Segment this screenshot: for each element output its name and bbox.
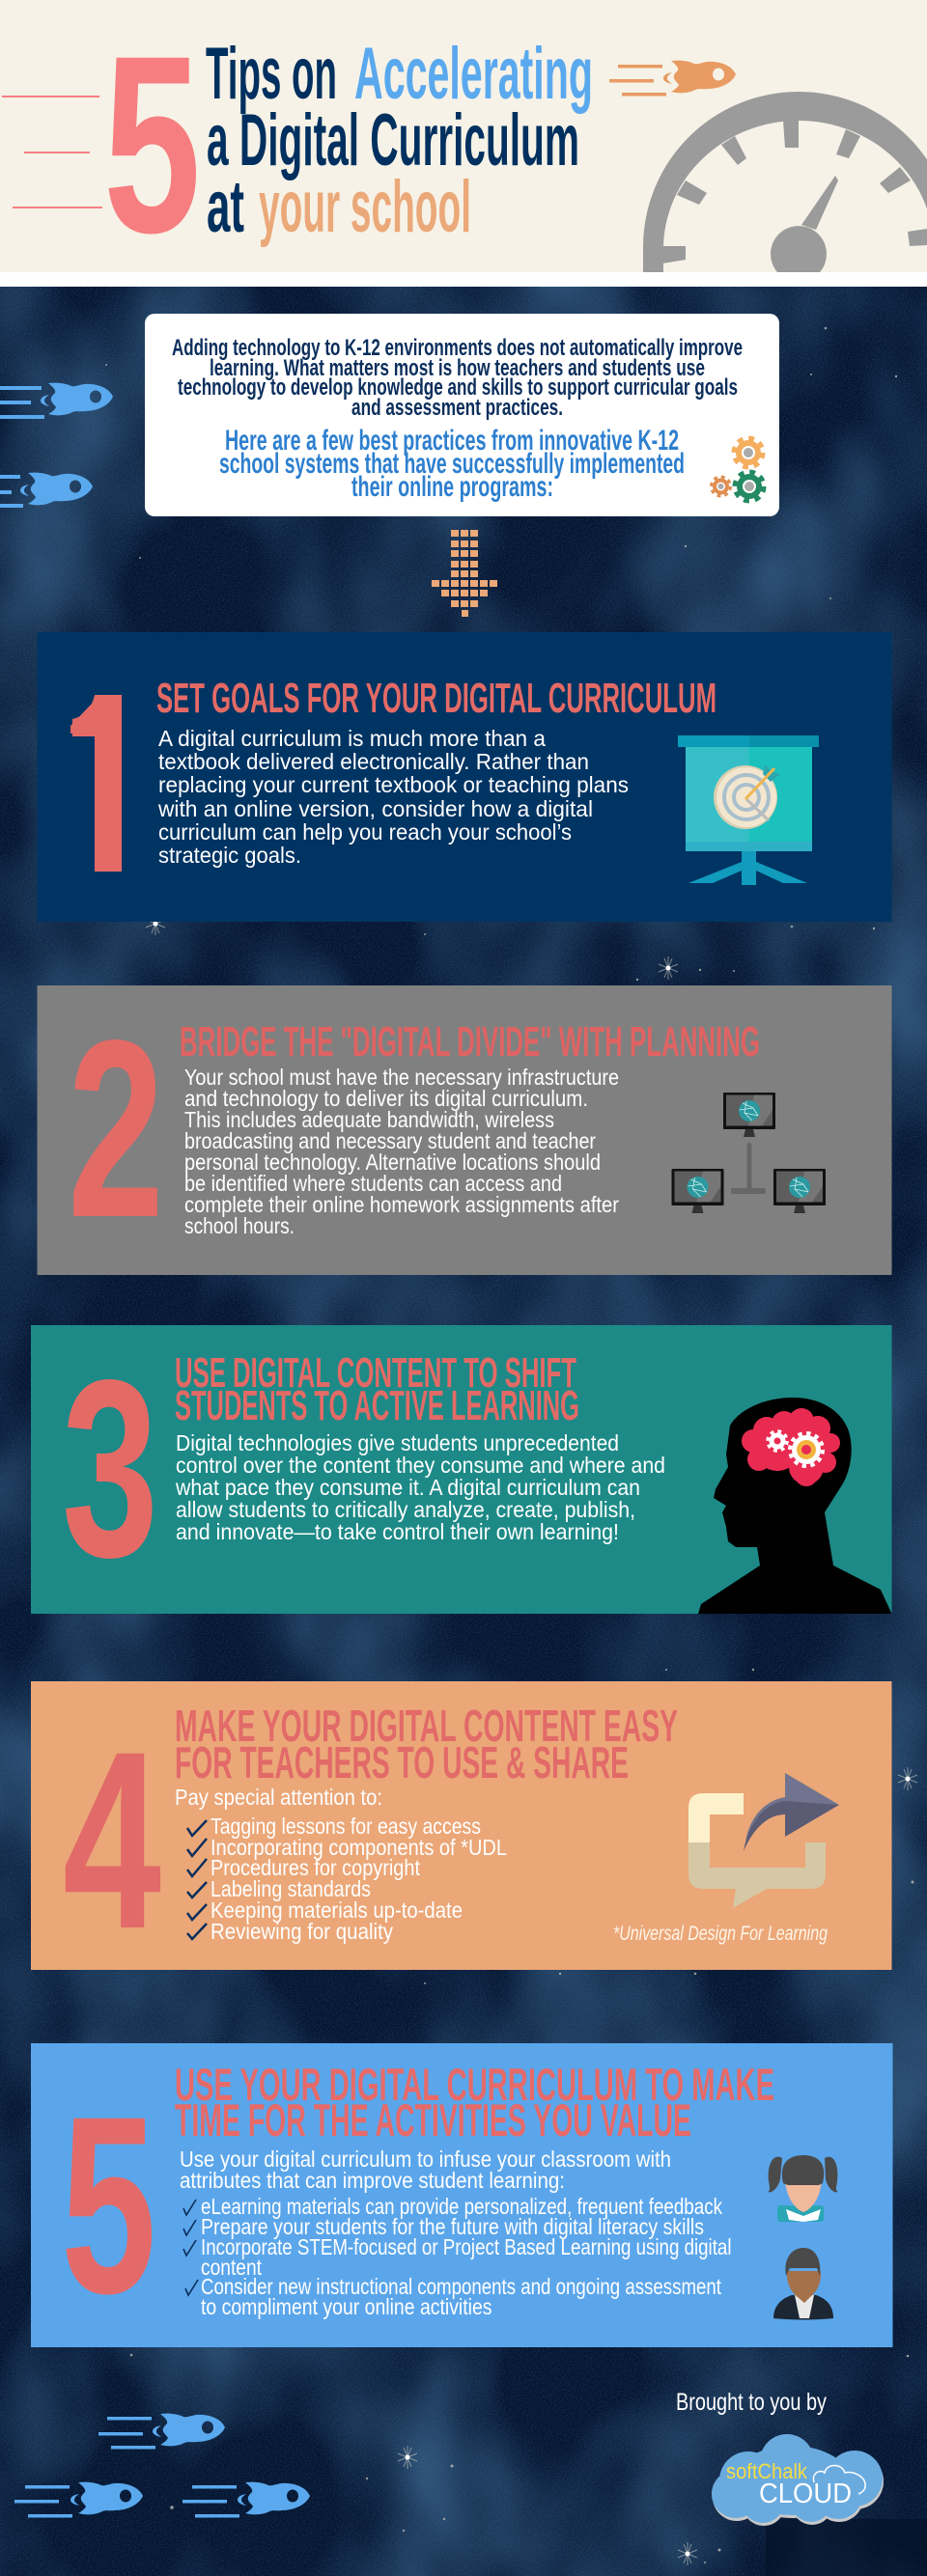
body text: [157, 726, 629, 868]
icon: share speech bubble: [688, 1773, 839, 1908]
title: at: [207, 166, 244, 248]
intro card: [145, 314, 779, 516]
checklist: Reviewing for quality: [211, 1919, 393, 1944]
body text: school hours.: [184, 1213, 295, 1238]
logo: SoftChalk Cloud: [712, 2434, 884, 2526]
heading: [175, 1349, 579, 1429]
body text: allow students to critically analyze, create, publish,: [176, 1497, 635, 1522]
logo: SoftChalk Cloud: CLOUD: [759, 2479, 852, 2509]
checklist: Incorporating components of *UDL: [211, 1835, 507, 1860]
panel background: [37, 632, 892, 922]
cloud shape: [713, 2437, 884, 2526]
panel: tip 2: [37, 985, 892, 1275]
body text: and innovate—to take control their own learning!: [176, 1519, 619, 1544]
checklist: Incorporate STEM-focused or Project Based Learning using digital: [201, 2234, 732, 2259]
heading: FOR TEACHERS TO USE & SHARE: [175, 1737, 629, 1787]
body intro: Pay special attention to:: [175, 1785, 382, 1810]
white separator strip: [0, 272, 927, 287]
body text: what pace they consume it. A digital curriculum can: [175, 1475, 640, 1500]
icon: rocket footer top: [98, 2414, 225, 2450]
icon: head silhouette with gears: [698, 1398, 892, 1614]
icon: speedometer gauge: [643, 92, 927, 272]
body intro: attributes that can improve student learning:: [180, 2168, 565, 2193]
header background: [0, 0, 927, 272]
panel: tip 4: [31, 1681, 892, 1981]
panel background: [31, 1681, 892, 1970]
checklist: to compliment your online activities: [201, 2294, 492, 2319]
body text: curriculum can help you reach your school’s: [158, 819, 572, 845]
logo text: softChalk: [726, 2459, 808, 2483]
numeral 1: [58, 643, 151, 926]
body intro: [180, 2147, 671, 2193]
checklist: content: [201, 2255, 262, 2280]
icon: presentation board with target: [678, 735, 819, 885]
checklist: Prepare your students for the future with digital literacy skills: [201, 2214, 704, 2239]
icon: girl avatar: [768, 2155, 838, 2222]
intro paragraph: [172, 335, 743, 421]
intro highlight text: [219, 425, 685, 503]
title: a Digital Curriculum: [207, 99, 579, 181]
panel: tip 5: [31, 2043, 892, 2347]
checklist: Procedures for copyright: [211, 1855, 420, 1880]
numeral 3: 3: [62, 1327, 158, 1610]
checklist: Keeping materials up-to-date: [211, 1897, 463, 1923]
body text: [175, 1430, 665, 1544]
body text: [184, 1065, 619, 1238]
body text: complete their online homework assignments after: [184, 1192, 619, 1217]
intro paragraph: learning. What matters most is how teachers and students use: [210, 355, 705, 381]
body text: This includes adequate bandwidth, wireless: [184, 1107, 554, 1132]
heading: [175, 2059, 774, 2146]
panel background: [31, 2043, 892, 2347]
icon: networked monitors: [672, 1093, 826, 1213]
small cloud outline: [813, 2465, 865, 2494]
speed lines beside the big five: [2, 96, 102, 208]
body text: with an online version, consider how a digital: [157, 796, 593, 821]
credit line: Brought to you by: [676, 2389, 827, 2416]
checklist: Tagging lessons for easy access: [211, 1814, 481, 1839]
panel: tip 3: [31, 1325, 892, 1614]
body text: control over the content they consume and where and: [176, 1453, 665, 1478]
intro highlight text: school systems that have successfully implemented: [219, 448, 685, 480]
body text: strategic goals.: [158, 843, 301, 868]
icon: gears: [711, 438, 764, 501]
numeral 1: 1: [60, 643, 147, 926]
title: Tips on: [206, 33, 337, 115]
body text: Digital technologies give students unprecedented: [176, 1430, 619, 1455]
icon: blue rocket upper: [0, 383, 113, 419]
body text: A digital curriculum is much more than a: [158, 726, 547, 751]
intro highlight text: their online programs:: [351, 471, 553, 503]
heading: [175, 1701, 678, 1787]
body text: and technology to deliver its digital curriculum.: [184, 1086, 588, 1111]
icon: orange rocket: [609, 61, 736, 97]
body text: personal technology. Alternative locations should: [184, 1150, 601, 1175]
body text: Your school must have the necessary infrastructure: [184, 1065, 619, 1090]
icon: rocket footer right: [183, 2482, 310, 2517]
checklist: Labeling standards: [211, 1876, 371, 1901]
icon: blue rocket lower: [0, 473, 93, 508]
panel background: [37, 985, 892, 1275]
header band: [0, 0, 927, 287]
intro highlight text: Here are a few best practices from innovative K-12: [225, 425, 679, 457]
checklist: [183, 2194, 732, 2319]
checklist: [187, 1814, 507, 1944]
icon: rocket footer left: [14, 2482, 143, 2517]
icon: boy avatar: [773, 2248, 833, 2320]
numeral 2: 2: [68, 987, 164, 1270]
numeral 5: 5: [61, 2064, 156, 2346]
big numeral 5: 5: [103, 3, 201, 286]
panel background: [31, 1325, 892, 1614]
checklist: Consider new instructional components and ongoing assessment: [201, 2274, 721, 2299]
card background: [145, 314, 779, 516]
checklist: eLearning materials can provide personalized, frequent feedback: [201, 2194, 722, 2219]
pixel arrow pointing down: [432, 530, 497, 617]
body text: be identified where students can access and: [184, 1171, 562, 1196]
title: Accelerating: [354, 33, 593, 115]
panel: tip 1: [37, 632, 892, 926]
numeral 4: 4: [63, 1699, 162, 1981]
body text: broadcasting and necessary student and teacher: [184, 1128, 596, 1153]
heading: STUDENTS TO ACTIVE LEARNING: [175, 1382, 579, 1429]
title: your school: [259, 166, 471, 248]
footnote: *Universal Design For Learning: [613, 1923, 828, 1945]
title: [206, 33, 593, 248]
intro paragraph: and assessment practices.: [351, 395, 563, 421]
body text: replacing your current textbook or teaching plans: [158, 772, 629, 797]
body text: textbook delivered electronically. Rather than: [158, 749, 589, 774]
body intro: Use your digital curriculum to infuse your classroom with: [180, 2147, 671, 2172]
heading: USE DIGITAL CONTENT TO SHIFT: [175, 1349, 576, 1397]
